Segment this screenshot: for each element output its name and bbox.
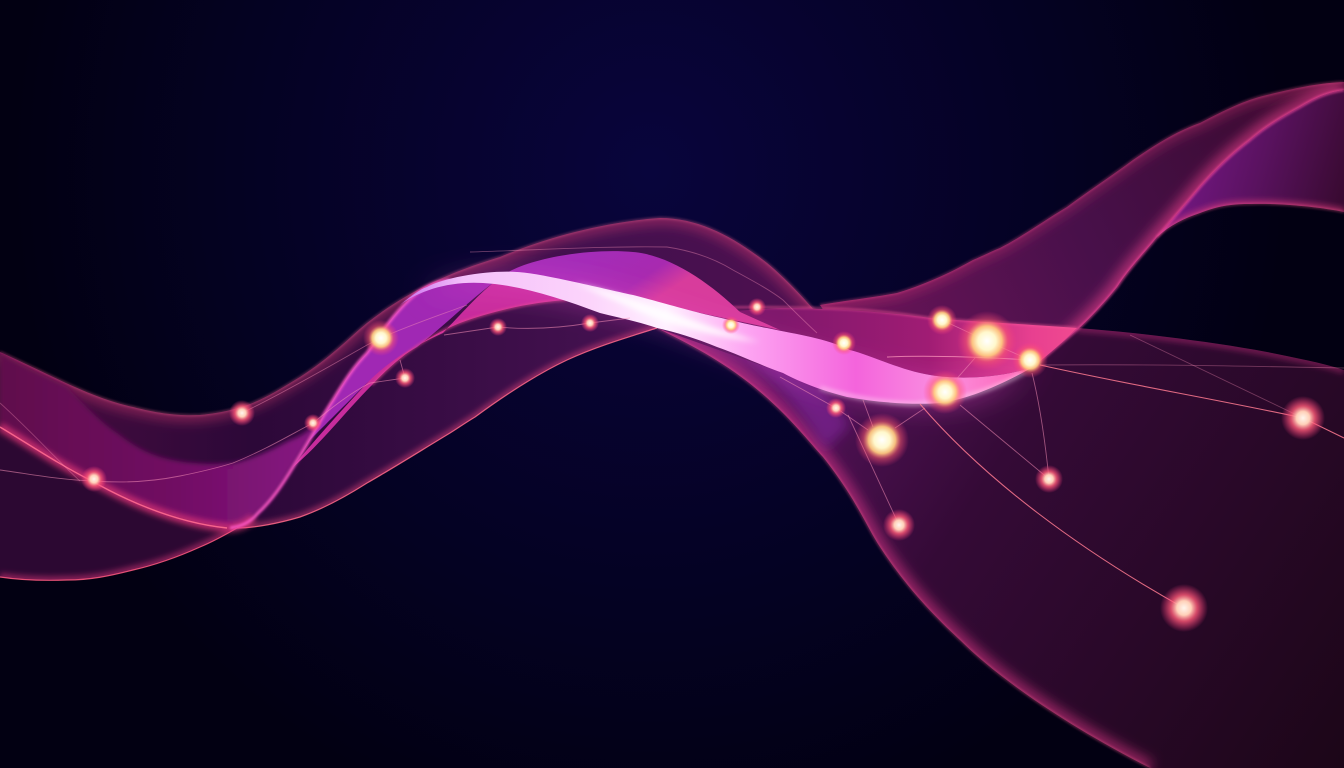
node: small left 2 xyxy=(304,414,322,432)
node: glow at ribbon fold xyxy=(363,320,399,356)
node: lower xyxy=(883,509,915,541)
ribbon: pink strip under purple fold xyxy=(293,283,640,467)
node: small left xyxy=(395,368,415,388)
node: large glow lower centre xyxy=(855,413,909,467)
ribbon: lower left band xyxy=(0,427,237,580)
node: small top right xyxy=(927,305,957,335)
ribbon: magenta fold on left xyxy=(0,353,333,528)
node: small mid left 2 xyxy=(489,318,507,336)
glowing nodes xyxy=(81,298,1325,632)
node: small centre xyxy=(832,331,856,355)
network lines xyxy=(0,247,1344,525)
node: glow on core xyxy=(923,370,967,414)
ribbon: upper right purple panel xyxy=(1033,90,1344,367)
node: small above core xyxy=(748,298,766,316)
node: large glow centre right xyxy=(957,311,1017,371)
ribbon: main band left to centre xyxy=(0,218,850,528)
ribbon: lower right sheet xyxy=(657,308,1344,768)
node: left xyxy=(229,400,255,426)
node: small on core xyxy=(722,316,740,334)
ribbon glow behind core xyxy=(420,277,1035,404)
node: large glow bottom right xyxy=(1160,584,1208,632)
ribbon: bright edge of fold xyxy=(230,280,450,528)
bright network lines xyxy=(920,365,1344,608)
node: small mid left xyxy=(581,314,599,332)
node: glow near ribbon edge xyxy=(1012,342,1048,378)
ribbon: purple dome fold above core xyxy=(505,251,780,330)
ribbon: purple fold rising to core xyxy=(293,282,493,467)
node: small right xyxy=(1035,465,1063,493)
node: far left xyxy=(81,466,107,492)
ribbon: bright central core xyxy=(400,272,1033,404)
ribbon: magenta area above core xyxy=(700,307,1077,378)
node: large glow far right xyxy=(1281,396,1325,440)
node: small under centre xyxy=(826,398,846,418)
ribbon: upper right band xyxy=(820,82,1344,367)
